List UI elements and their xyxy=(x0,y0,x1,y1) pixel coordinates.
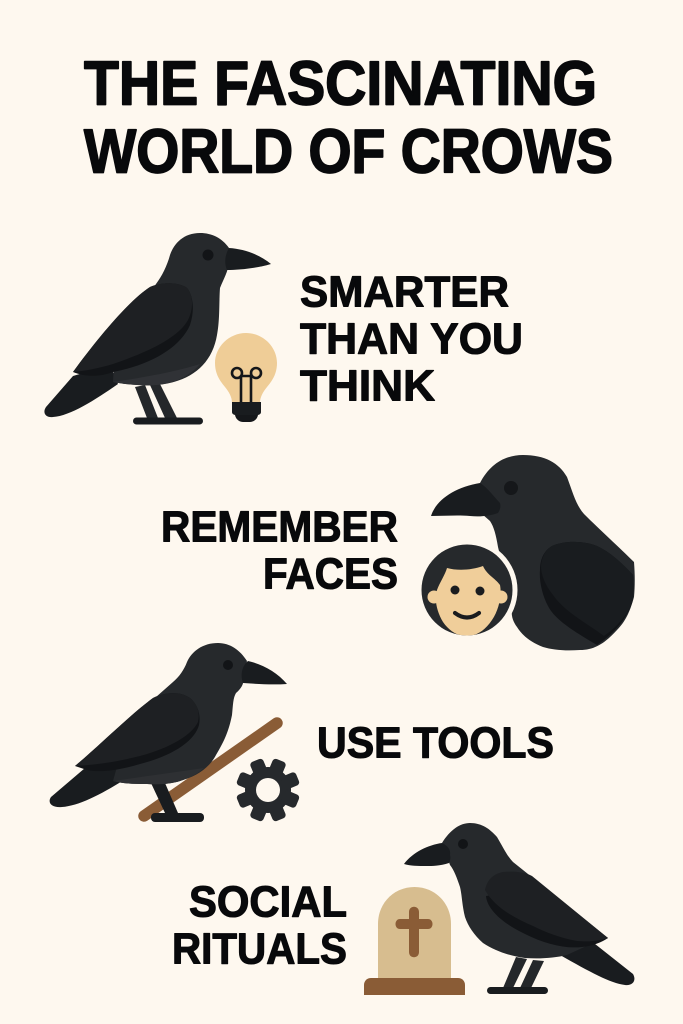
panel: remember faces xyxy=(161,455,635,650)
illustration: crow facing left xyxy=(404,823,634,994)
heading: use tools: USE TOOLS xyxy=(317,718,554,768)
illustration: standing crow xyxy=(44,233,271,424)
heading: smarter than you think: THAN YOU xyxy=(300,314,523,364)
icon: light bulb xyxy=(215,333,277,422)
icon: wooden stick xyxy=(144,723,277,816)
heading: remember faces: REMEMBER xyxy=(161,502,398,552)
heading: smarter than you think xyxy=(300,268,523,410)
illustration: crow with stick xyxy=(50,643,287,822)
icon: cross xyxy=(396,907,432,957)
panel: social rituals xyxy=(172,823,634,995)
title xyxy=(84,50,613,186)
icon: tombstone xyxy=(364,887,465,995)
illustration: crow portrait xyxy=(431,455,635,650)
title: THE FASCINATING xyxy=(84,50,597,118)
heading: social rituals xyxy=(172,878,347,974)
panel: smarter than you think xyxy=(44,233,523,424)
icon: smiling face xyxy=(422,544,518,636)
heading: social rituals: SOCIAL xyxy=(189,878,347,926)
heading: remember faces xyxy=(161,502,398,598)
heading: social rituals: RITUALS xyxy=(172,924,347,974)
panel: use tools xyxy=(50,643,554,822)
heading: smarter than you think: THINK xyxy=(300,362,435,410)
infographic canvas xyxy=(44,60,635,995)
heading: remember faces: FACES xyxy=(263,550,398,598)
heading: smarter than you think: SMARTER xyxy=(300,268,509,316)
icon: gear xyxy=(236,758,300,822)
title: WORLD OF CROWS xyxy=(84,118,613,186)
